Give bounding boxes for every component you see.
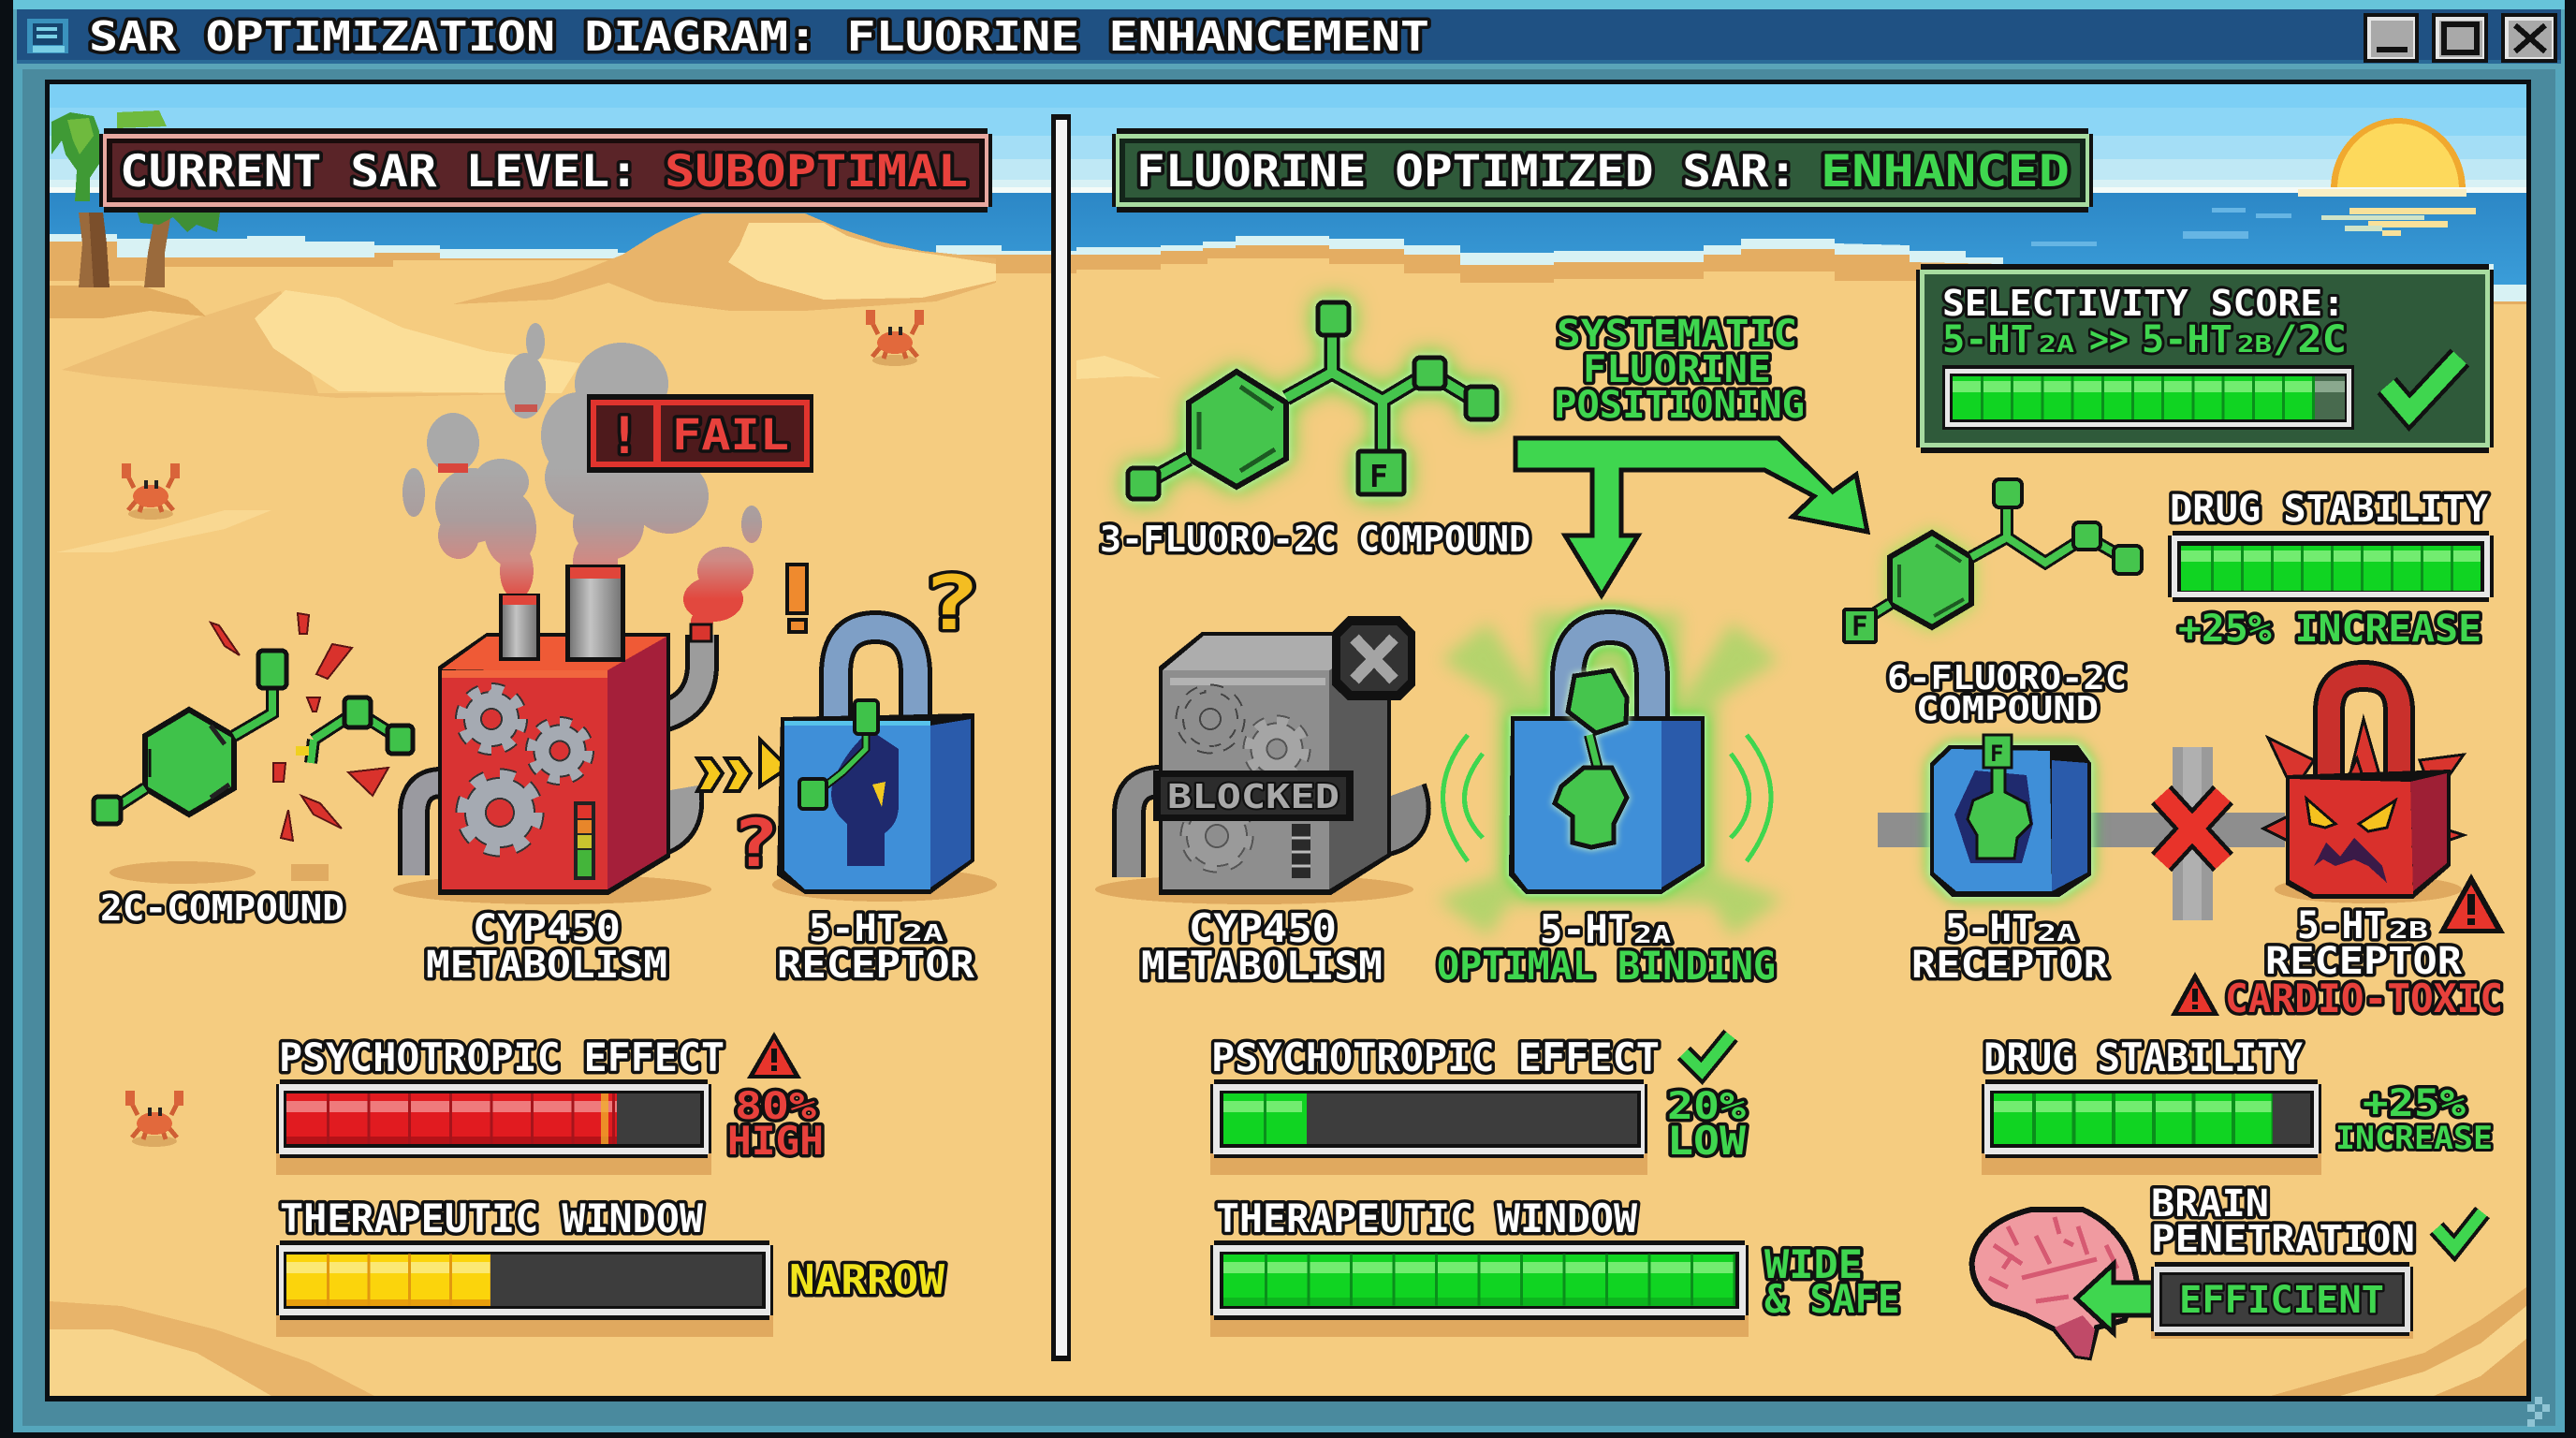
label: brain penetration [2151, 1182, 2415, 1261]
bar: psychotropic effect 20%: 20% [1667, 1085, 1746, 1128]
bar: therapeutic window narrow [276, 1196, 945, 1337]
label: 5-HT2A receptor: 2A [902, 919, 944, 946]
label: 3-fluoro-2C compound: 3-FLUORO-2C COMPOUND [1100, 519, 1530, 560]
bar: selectivity [1942, 365, 2354, 430]
label: 5-HT2B receptor: 2B [2389, 917, 2428, 944]
label: 5-HT2A optimal binding: 5-HT [1540, 906, 1631, 952]
label: 5-HT2A receptor: RECEPTOR [777, 944, 975, 987]
label: brain penetration: BRAIN [2151, 1182, 2269, 1225]
label: 5-HT2A receptor: 2A [2037, 919, 2076, 946]
label: 2C-compound: 2C-COMPOUND [100, 888, 344, 929]
keyhole [831, 730, 899, 866]
bar: psychotropic effect 20%: LOW [1667, 1118, 1747, 1164]
icon: small 5-HT2A receptor: F [1990, 741, 2003, 767]
banner: current SAR level [99, 128, 992, 213]
title: SAR OPTIMIZATION DIAGRAM: FLUORINE ENHANCEMENT [89, 13, 1429, 61]
icon: exclamation [787, 565, 807, 632]
icon: brain [1972, 1210, 2137, 1357]
molecule: 3-fluoro-2C: F [1369, 458, 1388, 494]
icon: check [1684, 1035, 1731, 1071]
banner: fluorine optimized SAR: FLUORINE OPTIMIZED SAR: [1136, 146, 1797, 198]
bar: drug stability (top): DRUG STABILITY [2170, 488, 2488, 531]
badge: fail: FAIL [672, 410, 789, 460]
panel: selectivity score: SELECTIVITY SCORE: [1942, 283, 2345, 324]
label: CYP450 metabolism [1141, 905, 1383, 989]
dead meter [1292, 824, 1310, 878]
label: 5-HT2A receptor: 5-HT [809, 907, 900, 950]
label: 5-HT2A receptor [1911, 907, 2109, 987]
label: CYP450 metabolism: CYP450 [1189, 905, 1337, 951]
icon: window menu [27, 19, 68, 53]
bar: psychotropic effect 80%: HIGH [727, 1118, 824, 1164]
resize grip [2527, 1397, 2550, 1427]
selectivity ratio: 5-HT [2142, 318, 2232, 361]
icon: red X [2161, 795, 2223, 862]
icon: red question mark: ? [732, 805, 779, 882]
label: CYP450 metabolism: CYP450 [473, 907, 621, 950]
panel: fluorine optimized SAR (right) [1095, 128, 2505, 1357]
sand dunes [50, 213, 2526, 1396]
center divider [1051, 114, 1071, 1361]
selectivity ratio [1942, 318, 2347, 361]
selectivity ratio: 5-HT [1942, 318, 2033, 361]
label: 5-HT2B receptor: RECEPTOR [2265, 940, 2463, 983]
label: systematic fluorine positioning [1554, 313, 1805, 427]
bar: psychotropic effect 20% [1210, 1034, 1747, 1175]
label: 5-HT2A receptor [777, 907, 975, 987]
label: 5-HT2A optimal binding [1437, 906, 1776, 989]
spikes [2263, 719, 2464, 847]
arrow: branching fluorine arrows [1515, 438, 1867, 595]
bar: therapeutic window wide: WIDE [1764, 1241, 1863, 1287]
bar: therapeutic window wide: & SAFE [1764, 1276, 1900, 1322]
icon: warning [747, 1032, 801, 1078]
icon: blue receptor lock [732, 560, 997, 902]
badge: fail: ! [608, 406, 640, 465]
icon: red 5-HT2B toxic lock [2263, 676, 2464, 903]
label: systematic fluorine positioning: POSITIONING [1554, 384, 1805, 427]
selectivity ratio: >> [2089, 318, 2129, 361]
group: brain penetration [1972, 1182, 2482, 1357]
label: 6-fluoro-2C compound: COMPOUND [1916, 690, 2099, 728]
machine: CYP450 blocked [1095, 616, 1415, 904]
badge: efficient: EFFICIENT [2179, 1279, 2384, 1322]
molecule: 6-fluoro-2C [1844, 479, 2142, 642]
angry eyes [2306, 799, 2335, 828]
label: 5-HT2B receptor [2265, 904, 2463, 983]
icon: X badge [1332, 616, 1415, 700]
bar: drug stability (bottom) [1982, 1034, 2493, 1175]
bar: psychotropic effect 80% [276, 1032, 824, 1175]
icon: small 5-HT2A receptor [1930, 735, 2091, 897]
label: 6-fluoro-2C compound: 6-FLUORO-2C [1887, 659, 2127, 697]
label: cardio-toxic: CARDIO-TOXIC [2225, 976, 2503, 1021]
banner: current SAR level: SUBOPTIMAL [665, 146, 968, 198]
badge: fail [587, 394, 813, 473]
icon: yellow question mark: ? [922, 560, 980, 647]
panel: current SAR (left) [94, 128, 997, 1337]
label: 5-HT2A optimal binding: 2A [1633, 921, 1671, 949]
bar: psychotropic effect 80%: 80% [735, 1085, 816, 1128]
label: 6-fluoro-2C compound [1887, 659, 2127, 728]
bar: psychotropic effect 20%: PSYCHOTROPIC EFFECT [1211, 1034, 1660, 1080]
inserted molecule [812, 712, 866, 796]
selectivity ratio: /2C [2273, 318, 2347, 361]
pipes [414, 635, 702, 875]
icon: optimal binding lock [1437, 613, 1783, 936]
label: CYP450 metabolism: METABOLISM [1141, 943, 1383, 989]
panel: selectivity score [1916, 264, 2494, 453]
label: 5-HT2A receptor: 5-HT [1945, 907, 2034, 950]
molecule: 6-fluoro-2C: F [1852, 610, 1867, 642]
bar: drug stability (bottom): INCREASE [2335, 1120, 2493, 1157]
banner: fluorine optimized SAR: ENHANCED [1821, 146, 2070, 198]
wet sand band [50, 242, 2526, 337]
banner: current SAR level: CURRENT SAR LEVEL: [120, 146, 638, 198]
pathway bars with red X [1878, 747, 2285, 920]
label: systematic fluorine positioning: FLUORINE [1583, 348, 1771, 391]
bar: therapeutic window narrow: THERAPEUTIC WINDOW [280, 1196, 704, 1241]
bar: drug stability (bottom): DRUG STABILITY [1983, 1034, 2304, 1080]
icon: fractured 2C molecule [94, 613, 413, 884]
chimneys [499, 565, 625, 662]
jagged mouth [2314, 838, 2387, 883]
gears [1181, 690, 1305, 867]
bound molecule [1555, 670, 1627, 847]
banner: fluorine optimized SAR [1112, 128, 2093, 213]
selectivity ratio: 2A [2039, 330, 2074, 358]
label: 5-HT2A receptor: RECEPTOR [1911, 944, 2109, 987]
smoke plumes [402, 323, 762, 633]
palm trees [51, 110, 220, 287]
label: CYP450 metabolism [426, 907, 667, 987]
icon: big check [2387, 358, 2460, 412]
arrow: flow chevrons [697, 740, 788, 791]
bar: therapeutic window wide: THERAPEUTIC WINDOW [1216, 1196, 1638, 1241]
shoreline foam [50, 234, 2526, 323]
label: CYP450 metabolism: METABOLISM [426, 944, 667, 987]
bar: drug stability (top): +25% INCREASE [2178, 608, 2481, 651]
crabs [122, 310, 924, 1147]
label: 5-HT2A optimal binding: OPTIMAL BINDING [1437, 943, 1776, 989]
bar: therapeutic window narrow: NARROW [789, 1256, 945, 1304]
label: brain penetration: PENETRATION [2151, 1218, 2415, 1261]
badge: blocked [1153, 770, 1354, 821]
sun [2331, 118, 2466, 189]
machine: CYP450 metabolism failing [393, 565, 711, 904]
arrow: into brain [2076, 1264, 2153, 1333]
bar: drug stability (top) [2168, 488, 2494, 651]
label: systematic fluorine positioning: SYSTEMATIC [1557, 313, 1797, 356]
molecule: 3-fluoro-2C [1128, 302, 1497, 499]
label: 5-HT2B receptor: 5-HT [2297, 904, 2386, 947]
sun reflections [2031, 189, 2476, 246]
icon: check [2437, 1212, 2482, 1248]
badge: efficient [2151, 1262, 2413, 1339]
dry sand [50, 258, 2526, 1396]
red fragments [211, 613, 388, 841]
bar: therapeutic window wide [1210, 1196, 1900, 1337]
badge: blocked: BLOCKED [1167, 778, 1339, 816]
bar: drug stability (bottom): +25% [2363, 1082, 2466, 1125]
window buttons [2364, 13, 2557, 63]
selectivity ratio: 2B [2237, 330, 2272, 358]
icon: warning 5-HT2B [2438, 873, 2505, 933]
status meter [574, 801, 595, 880]
bar: psychotropic effect 80%: PSYCHOTROPIC EFFECT [279, 1034, 724, 1080]
title bar [17, 9, 2561, 69]
green rays [1437, 613, 1783, 936]
vibration arcs [1443, 735, 1771, 861]
gears [461, 689, 588, 850]
